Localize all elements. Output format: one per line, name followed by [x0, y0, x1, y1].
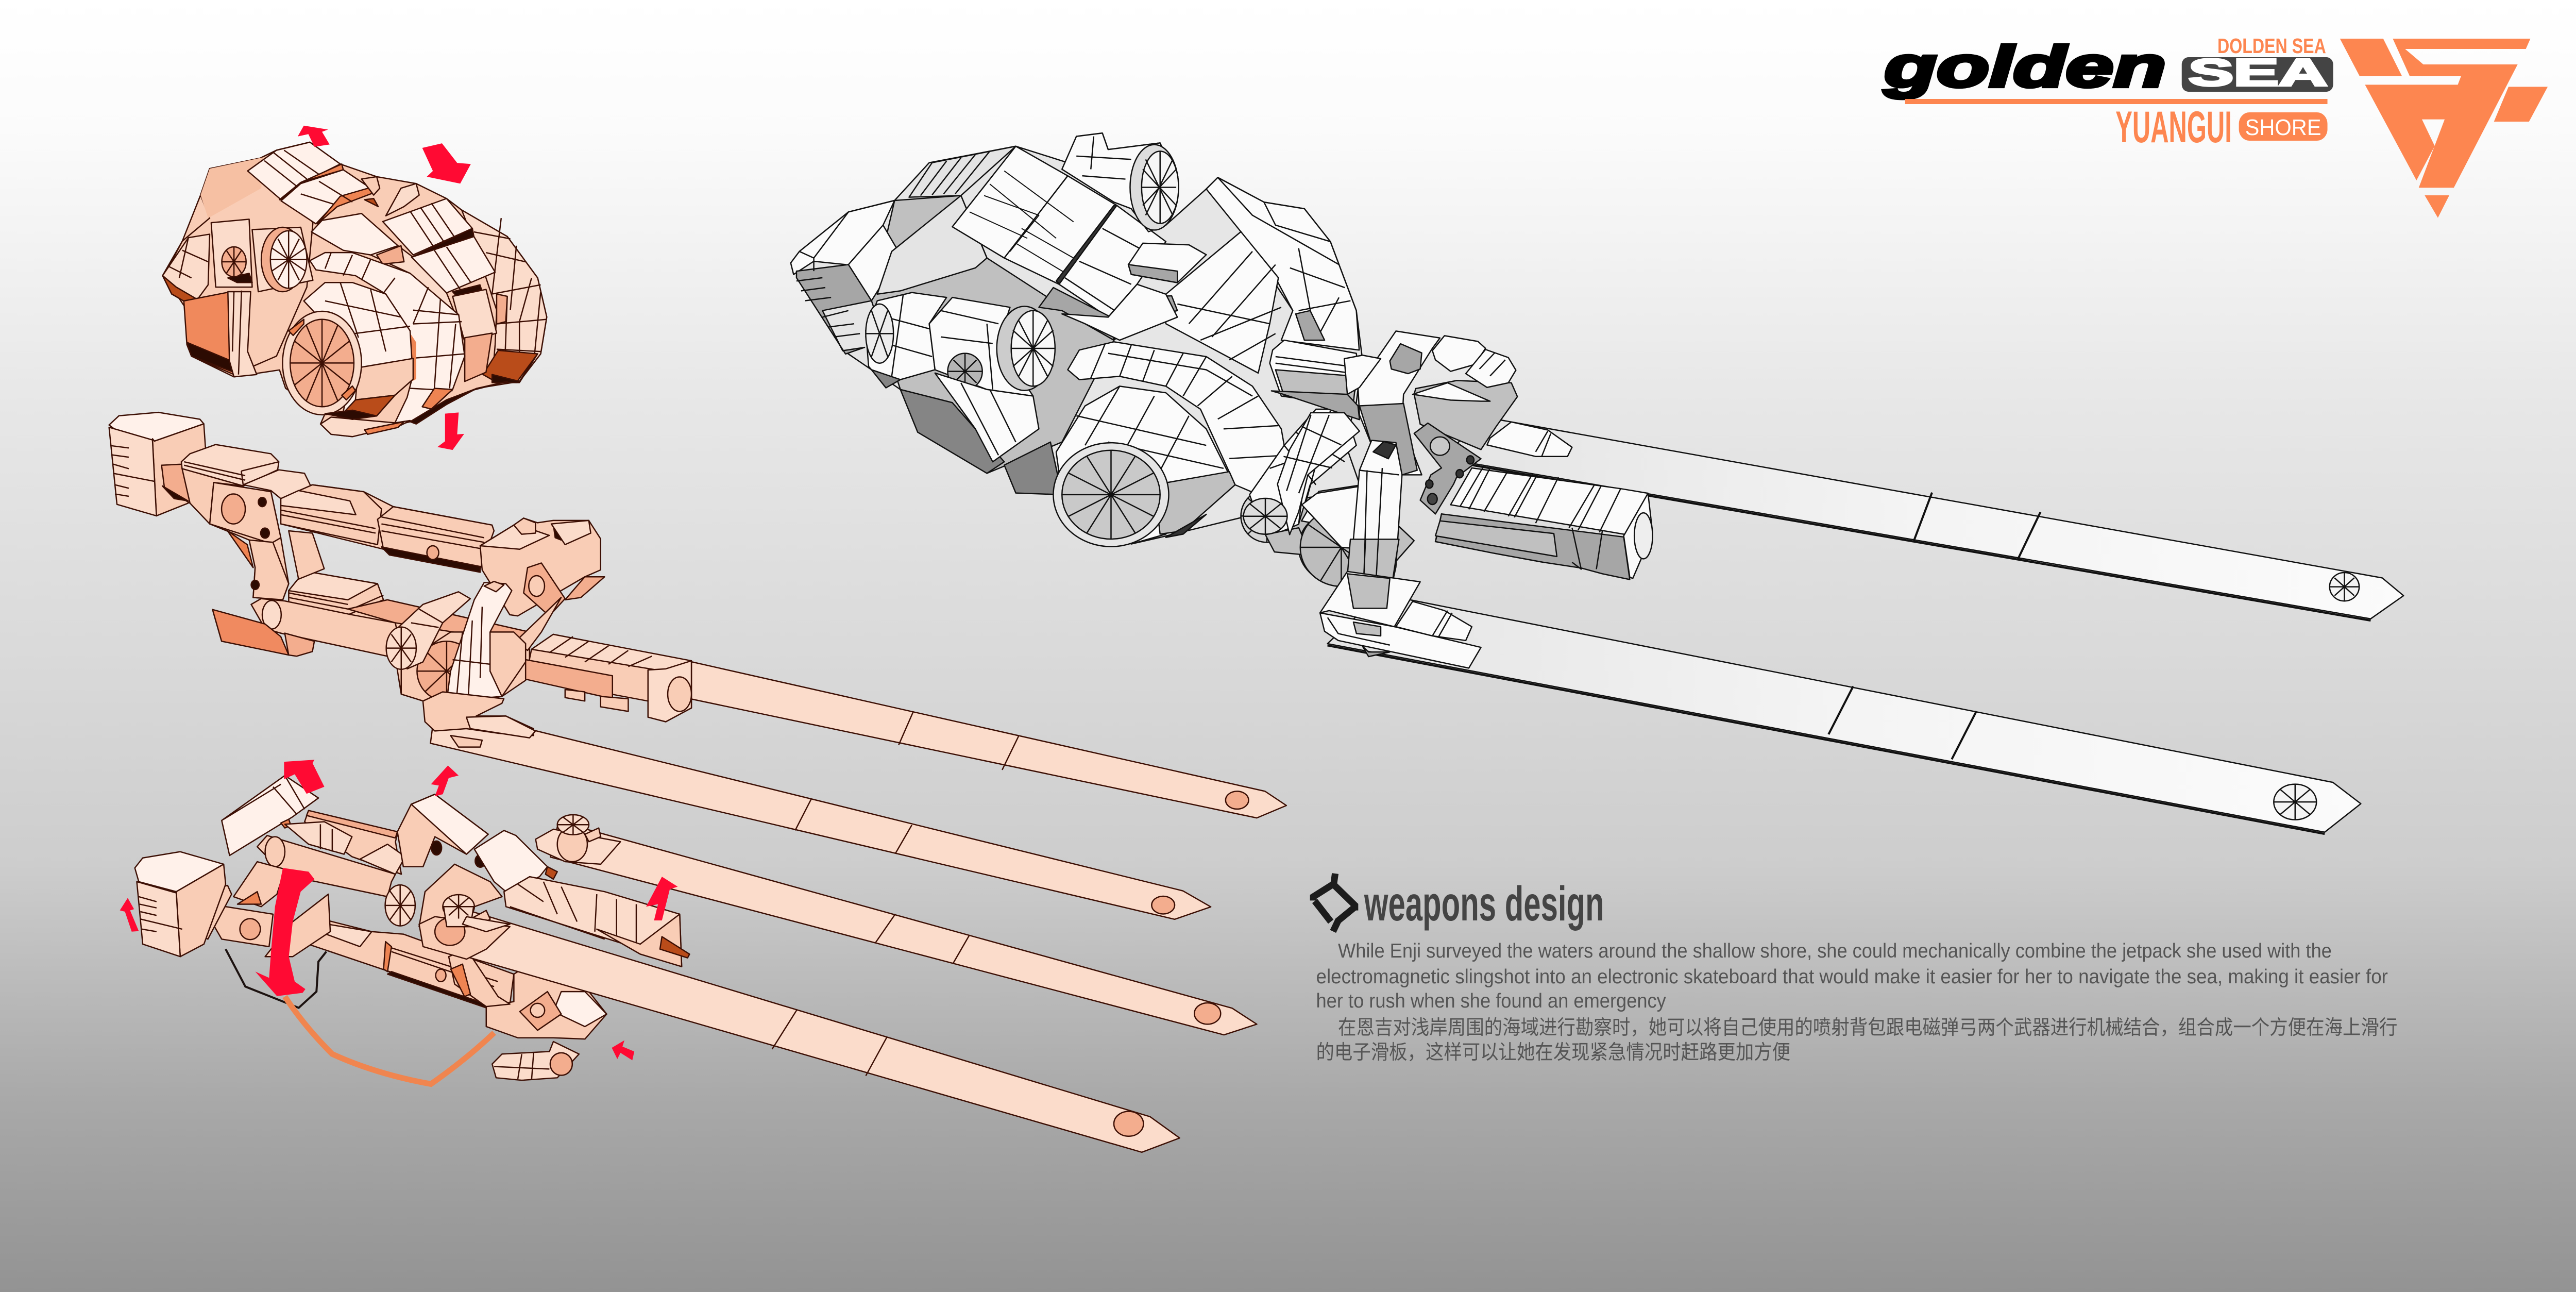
connector [162, 464, 190, 503]
description text block: electromagnetic slingshot into an electronic skateboard that would make it easier for her to navigate the sea, making it easier for [1316, 965, 2388, 987]
upper bracket clamp [536, 829, 620, 864]
big grey disc [1300, 508, 1382, 586]
plates right [383, 198, 472, 255]
rail block end [648, 661, 691, 721]
rear plate [206, 907, 273, 947]
right wing pack [1206, 177, 1359, 350]
rail end [1624, 493, 1653, 578]
jetpack silhouette [791, 133, 1414, 580]
arrow up left [298, 126, 330, 147]
upper tube silhouette [281, 485, 492, 569]
small box [289, 571, 383, 615]
emblem tip [2425, 195, 2449, 218]
top small parts [362, 177, 380, 195]
big curved arrow [255, 868, 314, 996]
ribbed top [909, 146, 1016, 197]
white rail block and bracket assembly [1244, 331, 1653, 668]
left block [791, 200, 901, 301]
stock box [181, 445, 279, 486]
shore pill: SHORE [2245, 115, 2321, 140]
engine body [304, 282, 413, 416]
cylinders [211, 219, 252, 287]
heading icon [1313, 874, 1355, 931]
centre body and discs [401, 632, 526, 703]
vertical arm [447, 582, 512, 701]
plate and arm silhouette [210, 482, 289, 600]
logo word golden: golden [1884, 34, 2166, 99]
top plates [248, 142, 340, 199]
vertical arm [1350, 440, 1402, 608]
lower arms [249, 540, 289, 600]
emblem left stroke [2340, 39, 2402, 76]
description text block: her to rush when she found an emergency [1316, 989, 1666, 1012]
lower discs [1267, 491, 1414, 580]
golden sea logo [1884, 34, 2333, 152]
centre plate [1059, 206, 1166, 317]
arrow up centre [431, 765, 459, 796]
left bulge [163, 234, 210, 306]
engine collar [1067, 342, 1287, 495]
long upper arm [257, 835, 396, 897]
arrow up left [120, 898, 139, 932]
rear body [164, 158, 313, 375]
big white skateboard rails [1328, 416, 2403, 834]
engine body [1056, 386, 1229, 544]
upper small cylinder [1062, 133, 1175, 232]
orange jetpack model [163, 142, 547, 437]
orange gun 2 folded, front part [419, 895, 579, 1080]
small block [1128, 243, 1206, 282]
butt block [109, 412, 204, 441]
heading text: weapons design [1364, 877, 1604, 931]
logo badge sea: SEA [2189, 52, 2328, 94]
gun 2 cord and red arrows [120, 760, 677, 1084]
left box [184, 292, 234, 375]
wheel disc [385, 885, 415, 926]
small orange title: DOLDEN SEA [2217, 35, 2326, 58]
tab on lower rail [1396, 601, 1472, 641]
front shaft [1270, 340, 1359, 406]
lower tube [299, 917, 514, 1006]
lower long bar [348, 600, 530, 644]
rear rail [304, 811, 401, 874]
lower clamp loop [1320, 613, 1481, 668]
fixing plate [1414, 423, 1481, 514]
emblem S stroke [2393, 39, 2530, 188]
engine collar [310, 253, 465, 423]
wheel and arm [1265, 528, 1311, 556]
tab on upper rail [1487, 422, 1572, 457]
orange rails [430, 662, 1286, 1035]
rail block top [1451, 468, 1648, 534]
small rear bar [1435, 514, 1554, 562]
right wing [462, 210, 547, 381]
big white jetpack model [791, 133, 1414, 585]
x plate [523, 563, 565, 616]
upper rail [1446, 416, 2403, 619]
lower end body [486, 959, 607, 1039]
hook grip [492, 1042, 579, 1080]
tilted flap [222, 776, 318, 855]
centre block [397, 794, 488, 867]
rail block [526, 634, 691, 721]
butt block [186, 885, 231, 939]
black wire [226, 949, 326, 1008]
top knobs [1432, 335, 1485, 372]
bracket [1358, 331, 1440, 475]
gun 1 lower rail [430, 706, 1211, 919]
jetpack silhouette [163, 142, 547, 437]
gun 2 lower rail [460, 911, 1180, 1152]
orange flap [212, 610, 289, 655]
side plate [210, 482, 281, 544]
centre connecting panel [1062, 284, 1177, 340]
chassis [872, 195, 1114, 473]
rail with blocks [504, 877, 682, 967]
lower body silhouette [251, 599, 530, 703]
engine face disc [282, 311, 362, 415]
emblem triangle [2365, 85, 2464, 180]
yuangui word: YUANGUI [2115, 102, 2232, 152]
lower clamp [1320, 572, 1420, 627]
orange cord [285, 997, 494, 1084]
description text block: While Enji surveyed the waters around the shallow shore, she could mechanically combine the jetpack she used with the [1338, 939, 2332, 962]
bottom grip [320, 417, 410, 437]
left cylinders [866, 293, 946, 386]
gun 2 upper rail [550, 821, 1257, 1035]
rail decals [1226, 791, 1249, 809]
arrow down right [422, 143, 471, 183]
orange gun 1 assembled [109, 412, 691, 747]
shaft joint [1344, 355, 1381, 394]
arrow up right [646, 877, 677, 920]
description text block: 的电子滑板，这样可以让她在发现紧急情况时赶路更加方便 [1316, 1041, 1790, 1063]
lower bracket [419, 917, 510, 959]
centre body [419, 864, 502, 927]
rail decal circles [2330, 573, 2359, 601]
emblem right bar [2494, 87, 2548, 122]
top knob box [1414, 380, 1517, 449]
arrow curved top [284, 760, 325, 794]
engine face disc [1053, 443, 1169, 547]
orange gun 2 folded, rear part [135, 776, 689, 1039]
description text block: 在恩吉对浅岸周围的海域进行勘察时，她可以将自己使用的喷射背包跟电磁弹弓两个武器进行机械结合，组合成一个方便在海上滑行 [1338, 1016, 2397, 1038]
centre mesh under plates [370, 246, 465, 338]
swing arm [233, 862, 285, 907]
rail clamp [423, 692, 534, 735]
centre top plate [311, 213, 398, 255]
logo divider bar [1905, 99, 2328, 104]
left lower wing [935, 373, 1039, 462]
red arrows on jetpack [298, 126, 471, 450]
description text block [1316, 939, 2397, 1063]
arrow down [437, 412, 464, 450]
top plates [952, 146, 1067, 258]
upper tubes [281, 485, 381, 545]
lower rail [1328, 594, 2361, 832]
central pack [1166, 232, 1278, 373]
logo badge sea [2182, 52, 2333, 94]
rail block side [1435, 514, 1630, 580]
gun 1 upper rail [682, 662, 1286, 818]
arrow lower right [612, 1041, 634, 1060]
section heading: weapons design [1313, 874, 1604, 931]
bracket [480, 518, 601, 616]
emblem logo [2340, 39, 2548, 218]
